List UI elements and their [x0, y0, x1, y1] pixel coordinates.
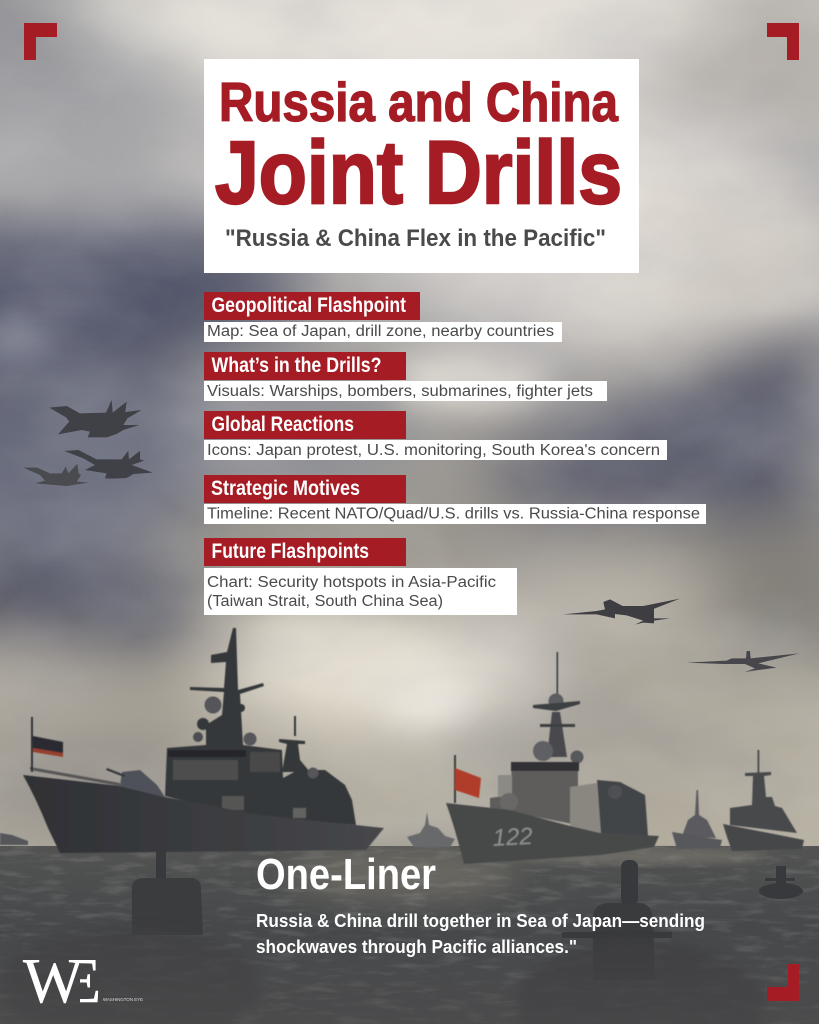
hull [23, 775, 384, 853]
bottom fade [0, 930, 819, 1024]
logo: Washington Eye [22, 960, 143, 1004]
section: What's in the Drills? [204, 352, 607, 401]
description box [204, 322, 562, 342]
submarine centre-right [515, 860, 765, 1024]
ship: background frigate [723, 750, 804, 851]
submarine left [0, 846, 260, 1024]
title line 2: Joint Drills [215, 122, 622, 222]
description box [204, 381, 607, 401]
heading: Geopolitical Flashpoint [212, 294, 406, 317]
description: Visuals: Warships, bombers, submarines, fighter jets [207, 383, 593, 400]
ship: Chinese frigate 122 [446, 652, 659, 864]
corner bracket top-right [767, 23, 799, 60]
description box [204, 440, 667, 460]
one-liner heading: One-Liner [256, 850, 436, 899]
section: Strategic Motives [204, 475, 706, 524]
heading bar [204, 475, 406, 503]
submarines [0, 846, 803, 1024]
heading: Strategic Motives [211, 477, 360, 500]
heading: What’s in the Drills? [212, 354, 382, 377]
ship: Russian destroyer [23, 628, 384, 853]
hull [446, 803, 659, 864]
heading bar [204, 411, 406, 439]
heading bar [204, 292, 420, 320]
superstructure and masts [490, 652, 648, 836]
section: Geopolitical Flashpoint [204, 292, 562, 342]
heading bar [204, 538, 406, 566]
hull number: 122 [492, 823, 533, 852]
heading bar [204, 352, 406, 380]
logo: Washington Eye: W [23, 946, 84, 1016]
superstructure and masts [30, 628, 356, 825]
bombers [563, 599, 799, 672]
flag: Russia [31, 717, 63, 772]
heading: Global Reactions [212, 413, 354, 436]
one-liner text: Russia & China drill together in Sea of Japan—sending [256, 910, 705, 931]
corner bracket bottom-right [767, 964, 799, 1001]
description: Icons: Japan protest, U.S. monitoring, South Korea's concern [207, 442, 660, 459]
description: Timeline: Recent NATO/Quad/U.S. drills vs. Russia-China response [207, 506, 700, 522]
logo: Washington Eye: WASHINGTON EYE [103, 997, 143, 1002]
description box [204, 568, 517, 615]
title panel [204, 59, 639, 273]
logo: Washington Eye: E [63, 946, 101, 1016]
description box [204, 504, 706, 524]
section: Global Reactions [204, 411, 667, 460]
section: Future Flashpoints [204, 538, 517, 615]
description: (Taiwan Strait, South China Sea) [207, 593, 443, 610]
fighter jets [23, 400, 153, 486]
title line 1: Russia and China [219, 71, 618, 133]
submarine far right [759, 866, 803, 899]
far island and distant ship [0, 812, 455, 847]
subtitle: "Russia & China Flex in the Pacific" [225, 225, 606, 252]
one-liner text: shockwaves through Pacific alliances." [256, 936, 577, 957]
description [207, 574, 496, 610]
heading: Future Flashpoints [212, 540, 369, 563]
description: Map: Sea of Japan, drill zone, nearby countries [207, 323, 554, 340]
corner bracket top-left [24, 23, 57, 60]
one-liner text [256, 910, 705, 957]
sea [0, 846, 819, 1024]
ship: background destroyer [672, 790, 722, 849]
description: Chart: Security hotspots in Asia-Pacific [207, 574, 496, 591]
flag: China [454, 755, 481, 803]
